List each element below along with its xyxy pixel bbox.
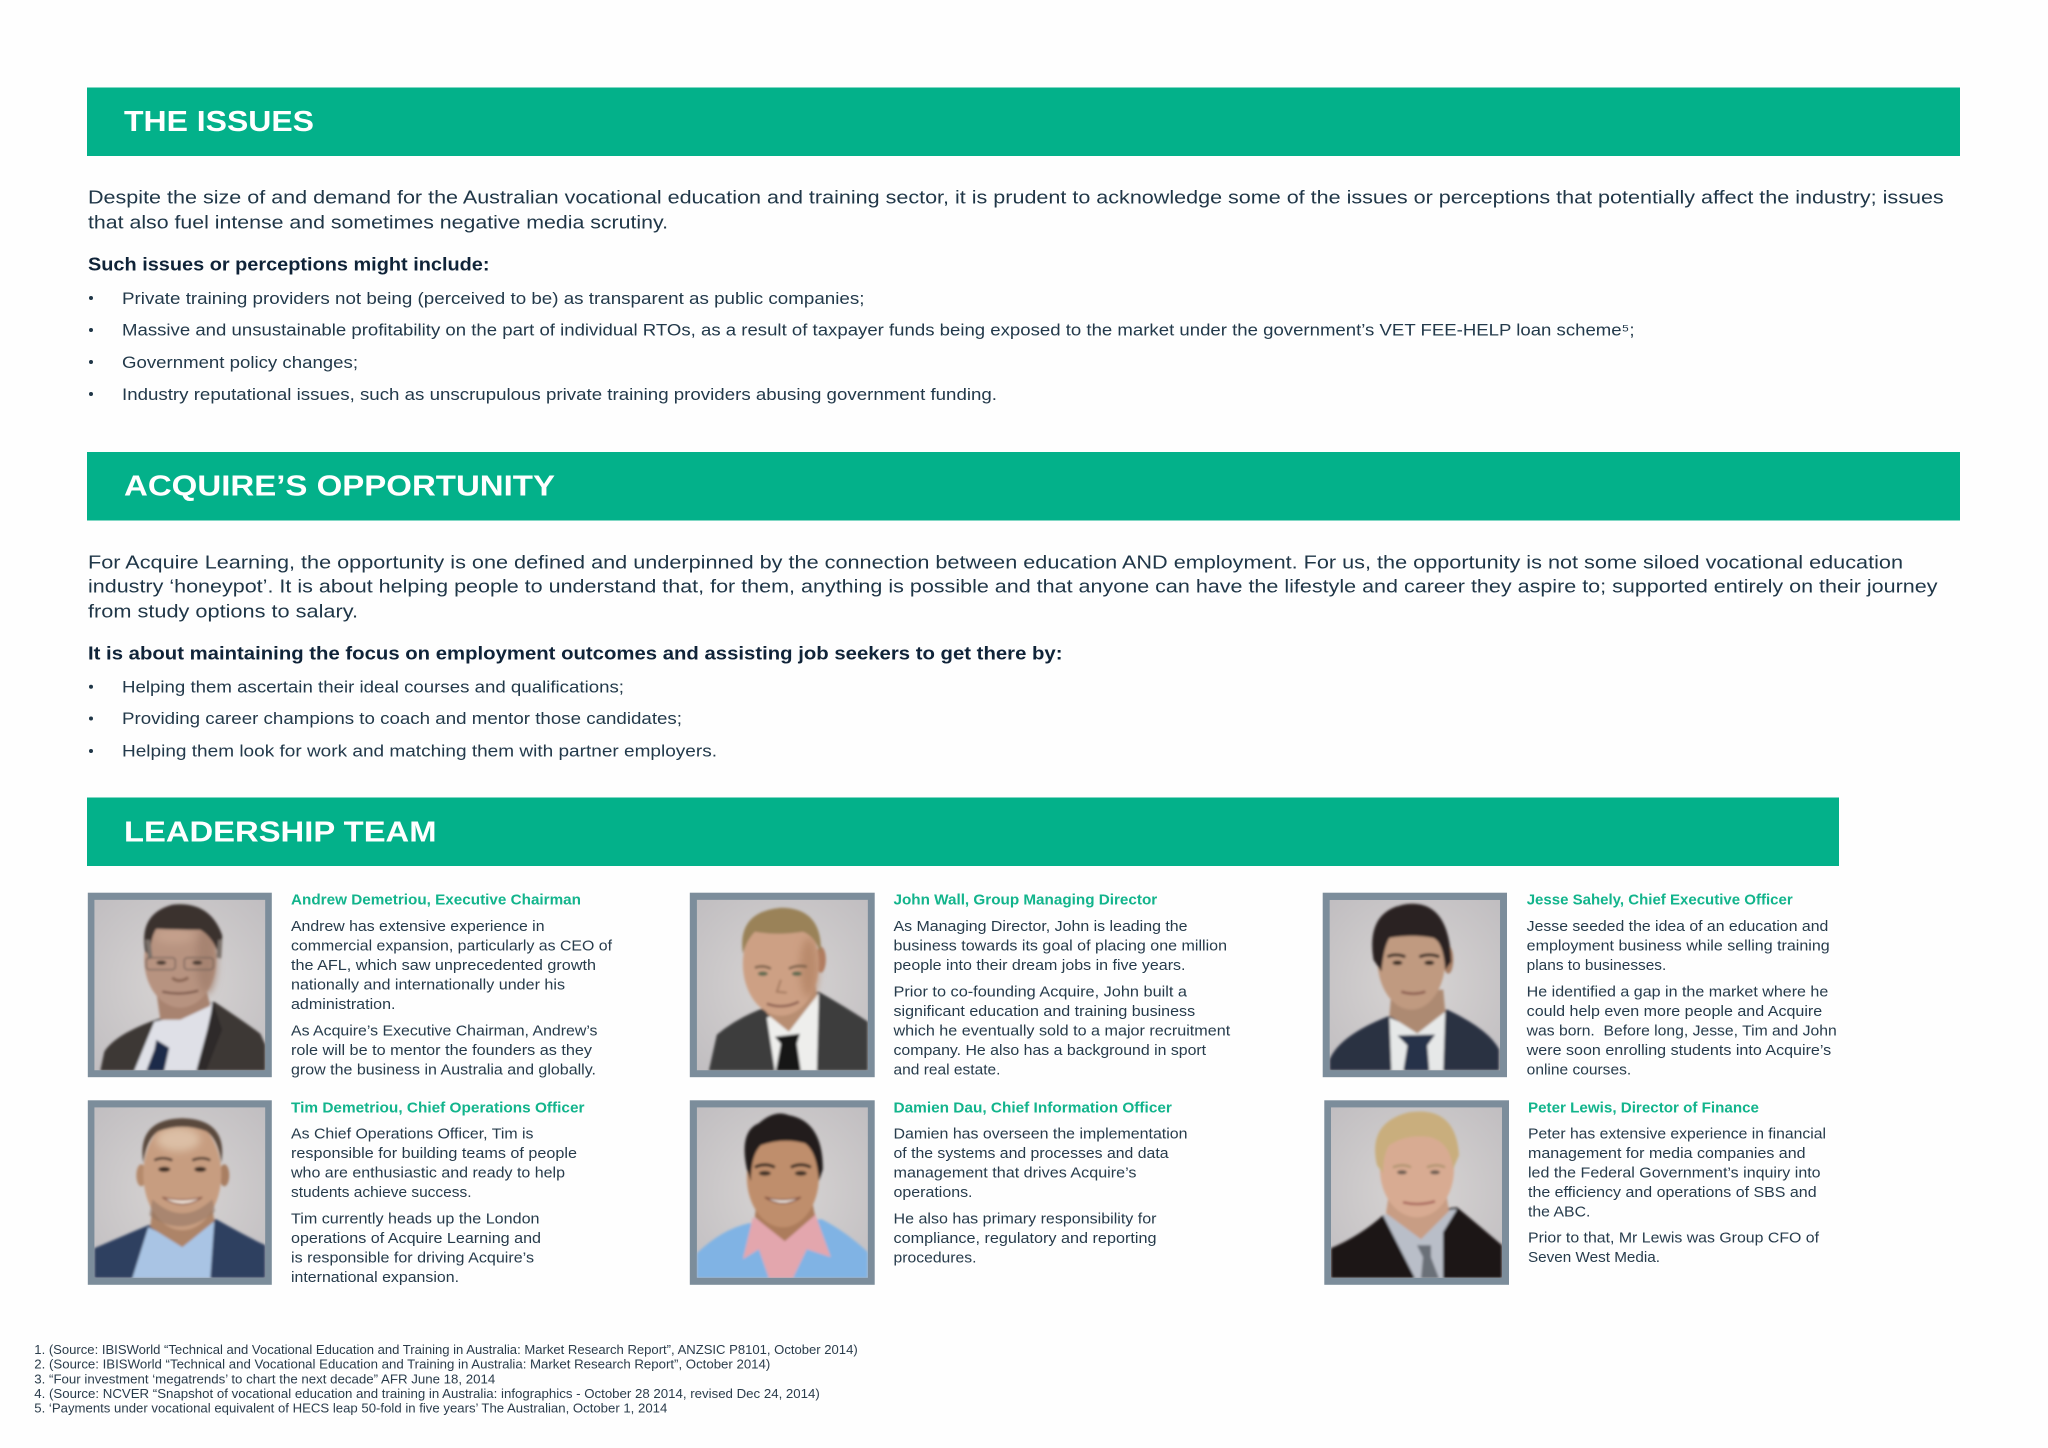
bio: Andrew Demetriou <box>291 918 613 1078</box>
bio: Peter Lewis: the efficiency and operations of SBS and <box>1528 1184 1817 1201</box>
bullet list: issues: Private training providers not being (perceived to be) as transparent as public companies; <box>122 289 864 308</box>
bio: Jesse Sahely: He identified a gap in the market where he <box>1527 983 1828 1000</box>
section: the issues <box>87 88 1960 404</box>
profile: Jesse Sahely <box>1323 892 1837 1078</box>
bullet list: issues: Massive and unsustainable profitability on the part of individual RTOs, as a result of taxpayer funds being exposed to the market under the government’s VET FEE-HELP loan scheme⁵; <box>122 321 1634 340</box>
bio: John Wall: As Managing Director, John is leading the <box>894 918 1188 935</box>
profile: Damien Dau <box>690 1099 1188 1285</box>
section: acquire's opportunity <box>87 452 1960 761</box>
intro paragraph: issues: Despite the size of and demand for the Australian vocational education and training sector, it is prudent to acknowledge some of the issues or perceptions that potentially affect the industry; issues <box>88 186 1944 207</box>
heading band: leadership team <box>87 798 1839 866</box>
bio: Tim Demetriou: who are enthusiastic and ready to help <box>290 1165 565 1182</box>
bio: Jesse Sahely <box>1526 918 1837 1078</box>
subheading: opportunity: It is about maintaining the focus on employment outcomes and assisting job seekers to get there by: <box>88 642 1062 663</box>
intro paragraph: opportunity: For Acquire Learning, the opportunity is one defined and underpinned by the connection between education AND employment. For us, the opportunity is not some siloed vocational education <box>88 551 1903 572</box>
bio: Peter Lewis: led the Federal Government’s inquiry into <box>1528 1165 1821 1182</box>
heading band: opportunity: ACQUIRE’S OPPORTUNITY <box>124 471 555 503</box>
footnotes: 5. ‘Payments under vocational equivalent of HECS leap 50-fold in five years’ The Australian, October 1, 2014 <box>34 1402 667 1416</box>
bio: Damien Dau: of the systems and processes and data <box>894 1145 1169 1162</box>
bio: Peter Lewis: Prior to that, Mr Lewis was Group CFO of <box>1528 1230 1820 1247</box>
bio: John Wall: which he eventually sold to a major recruitment <box>892 1022 1231 1039</box>
footnotes: 1. (Source: IBISWorld “Technical and Vocational Education and Training in Australia: Market Research Report”, ANZSIC P8101, October 2014) <box>34 1343 858 1357</box>
bio: Peter Lewis: Seven West Media. <box>1528 1249 1660 1266</box>
heading band: leadership team: LEADERSHIP TEAM <box>124 817 436 849</box>
footnotes: 2. (Source: IBISWorld “Technical and Vocational Education and Training in Australia: Market Research Report”, October 2014) <box>34 1358 770 1372</box>
footnotes <box>34 1343 858 1416</box>
bio: Damien Dau <box>894 1126 1188 1266</box>
photo: Damien Dau <box>690 1100 875 1285</box>
bio: Peter Lewis: Peter has extensive experience in financial <box>1528 1126 1826 1143</box>
name: Tim Demetriou: Tim Demetriou, Chief Operations Officer <box>291 1099 585 1116</box>
bio: Tim Demetriou: responsible for building teams of people <box>291 1145 577 1162</box>
subheading: issues: Such issues or perceptions might include: <box>88 254 489 275</box>
bio: Peter Lewis: management for media companies and <box>1528 1145 1806 1162</box>
photo: John Wall <box>690 893 875 1077</box>
intro paragraph: opportunity <box>88 551 1938 621</box>
bio: John Wall: business towards its goal of placing one million <box>894 938 1227 954</box>
name: Damien Dau: Damien Dau, Chief Information Officer <box>894 1099 1172 1116</box>
bio: Andrew Demetriou: As Acquire’s Executive Chairman, Andrew’s <box>291 1022 598 1039</box>
bio: John Wall: company. He also has a background in sport <box>894 1042 1207 1059</box>
bio: Jesse Sahely: could help even more people and Acquire <box>1527 1003 1822 1020</box>
profile: Tim Demetriou <box>88 1099 585 1286</box>
bio: John Wall: people into their dream jobs in five years. <box>894 957 1186 974</box>
bio: Peter Lewis <box>1528 1126 1826 1266</box>
bio: Damien Dau: operations. <box>894 1184 972 1201</box>
bio: Peter Lewis: the ABC. <box>1528 1204 1590 1221</box>
bio: Andrew Demetriou: Andrew has extensive experience in <box>291 918 544 935</box>
bio: Damien Dau: management that drives Acquire’s <box>894 1165 1136 1182</box>
intro paragraph: opportunity: from study options to salary. <box>88 600 358 621</box>
profile: John Wall <box>690 892 1231 1078</box>
bio: Damien Dau: He also has primary responsibility for <box>894 1210 1156 1227</box>
bio: Andrew Demetriou: grow the business in Australia and globally. <box>291 1061 596 1078</box>
bio: Jesse Sahely: were soon enrolling students into Acquire’s <box>1526 1042 1831 1059</box>
name: John Wall: John Wall, Group Managing Director <box>894 892 1157 909</box>
heading band: opportunity <box>87 452 1960 520</box>
intro paragraph: issues: that also fuel intense and sometimes negative media scrutiny. <box>88 211 668 232</box>
bio: Tim Demetriou <box>290 1126 577 1286</box>
bullet list: opportunity <box>89 677 717 761</box>
photo: Andrew Demetriou <box>88 893 272 1077</box>
bullet list: issues <box>89 289 1634 404</box>
intro paragraph: opportunity: industry ‘honeypot’. It is about helping people to understand that, for them, anything is possible and that anyone can have the lifestyle and career they aspire to; supported entirely on their journey <box>88 576 1938 597</box>
bio: Jesse Sahely: online courses. <box>1527 1061 1631 1078</box>
bio: Tim Demetriou: international expansion. <box>291 1269 459 1286</box>
heading band: the issues <box>87 88 1960 156</box>
bio: John Wall: Prior to co-founding Acquire, John built a <box>894 983 1188 1000</box>
bio: Damien Dau: Damien has overseen the implementation <box>894 1126 1188 1143</box>
bio: Damien Dau: compliance, regulatory and reporting <box>894 1230 1156 1247</box>
bio: Tim Demetriou: Tim currently heads up the London <box>291 1210 540 1227</box>
footnotes: 4. (Source: NCVER “Snapshot of vocational education and training in Australia: infographics - October 28 2014, revised Dec 24, 2014) <box>34 1387 820 1401</box>
bio: Jesse Sahely: employment business while selling training <box>1527 938 1830 954</box>
bio: Andrew Demetriou: nationally and internationally under his <box>291 976 565 994</box>
name: Jesse Sahely: Jesse Sahely, Chief Executive Officer <box>1527 892 1793 909</box>
bullet list: opportunity: Helping them ascertain their ideal courses and qualifications; <box>122 677 624 696</box>
bio: Damien Dau: procedures. <box>894 1249 976 1266</box>
bullet list: opportunity: Helping them look for work and matching them with partner employers. <box>122 742 717 761</box>
bio: Tim Demetriou: operations of Acquire Learning and <box>291 1230 541 1247</box>
bio: John Wall: significant education and training business <box>894 1003 1195 1020</box>
bio: Tim Demetriou: As Chief Operations Officer, Tim is <box>291 1126 534 1143</box>
profile: Peter Lewis <box>1324 1099 1826 1285</box>
bio: Andrew Demetriou: role will be to mentor the founders as they <box>291 1042 593 1059</box>
profile: Andrew Demetriou <box>88 892 613 1078</box>
bio: Tim Demetriou: is responsible for driving Acquire’s <box>291 1249 534 1266</box>
bio: Tim Demetriou: students achieve success. <box>291 1184 472 1201</box>
photo: Jesse Sahely <box>1323 893 1507 1077</box>
bio: Jesse Sahely: plans to businesses. <box>1527 957 1666 974</box>
intro paragraph: issues <box>88 186 1944 232</box>
bullet list: issues: Industry reputational issues, such as unscrupulous private training providers abusing government funding. <box>122 385 997 404</box>
name: Andrew Demetriou: Andrew Demetriou, Executive Chairman <box>291 892 581 909</box>
bio: Andrew Demetriou: the AFL, which saw unprecedented growth <box>291 957 596 974</box>
bio: John Wall: and real estate. <box>894 1061 1000 1078</box>
photo: Tim Demetriou <box>88 1100 272 1285</box>
bio: Jesse Sahely: was born. Before long, Jesse, Tim and John <box>1526 1022 1837 1039</box>
bio: John Wall <box>892 918 1231 1078</box>
bullet list: opportunity: Providing career champions to coach and mentor those candidates; <box>122 709 682 728</box>
bio: Andrew Demetriou: commercial expansion, particularly as CEO of <box>291 938 613 954</box>
name: Peter Lewis: Peter Lewis, Director of Finance <box>1528 1099 1759 1116</box>
bio: Jesse Sahely: Jesse seeded the idea of an education and <box>1527 918 1828 935</box>
bio: Andrew Demetriou: administration. <box>291 996 396 1013</box>
footnotes: 3. “Four investment ‘megatrends’ to chart the next decade” AFR June 18, 2014 <box>34 1372 495 1386</box>
heading band: the issues: THE ISSUES <box>124 106 314 138</box>
section: leadership team <box>87 798 1839 1286</box>
bullet list: issues: Government policy changes; <box>122 353 358 372</box>
photo: Peter Lewis <box>1324 1100 1509 1285</box>
